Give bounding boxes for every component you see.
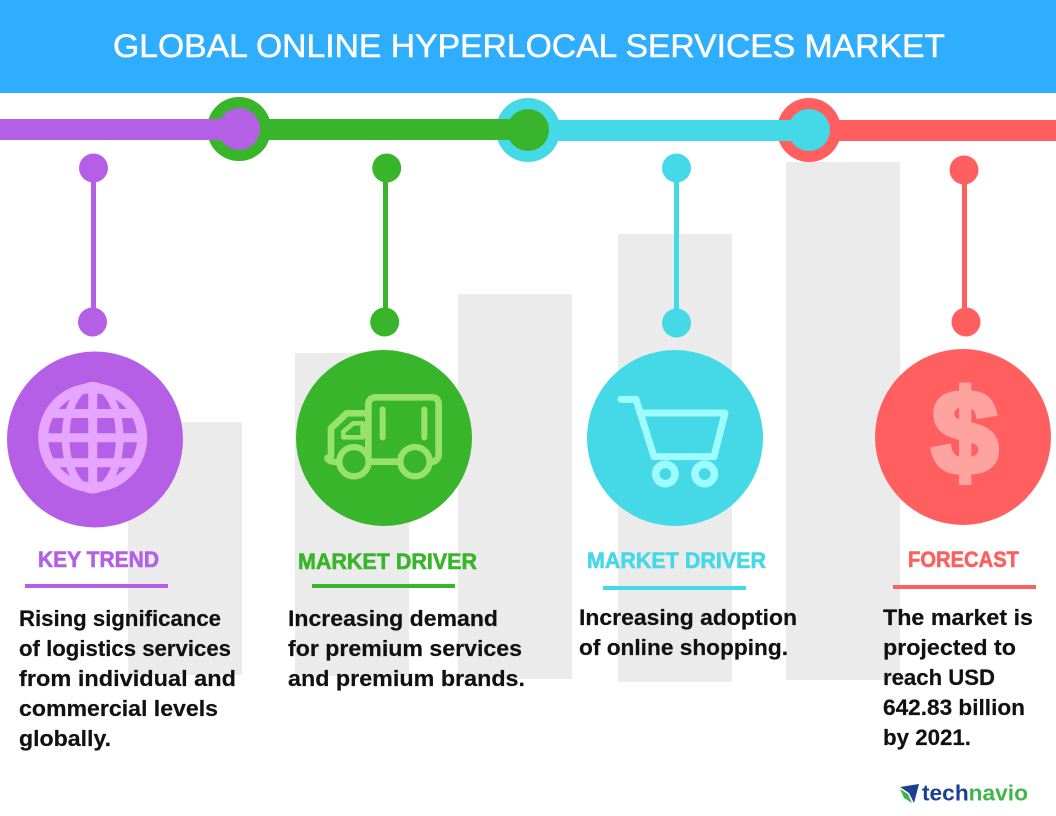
logo: technavio xyxy=(900,780,1028,806)
underline: delivery xyxy=(312,584,455,588)
text: shopping: of online shopping. xyxy=(579,635,788,660)
text: shopping: Increasing adoption xyxy=(579,605,797,630)
text: key trend: from individual and xyxy=(19,666,236,691)
icon: truck xyxy=(327,397,439,476)
circle: key trend xyxy=(7,352,183,528)
text: forecast: The market is xyxy=(883,605,1033,630)
text: forecast xyxy=(883,605,1033,750)
connector: forecast xyxy=(950,156,980,336)
text: forecast: projected to xyxy=(883,635,1016,660)
text: delivery: for premium services xyxy=(288,636,522,661)
connector: key trend xyxy=(78,154,108,336)
underline: forecast xyxy=(893,585,1036,589)
panel: key trend xyxy=(7,154,236,751)
text: forecast: by 2021. xyxy=(883,725,971,750)
text: delivery: Increasing demand xyxy=(288,606,498,631)
heading: forecast: FORECAST xyxy=(908,547,1019,572)
panel: forecast xyxy=(875,156,1051,750)
heading: market driver, shopping: MARKET DRIVER xyxy=(587,548,766,573)
connector: delivery xyxy=(370,154,401,336)
title: GLOBAL ONLINE HYPERLOCAL SERVICES MARKET xyxy=(113,28,945,64)
logo wordmark: technavio xyxy=(922,780,1028,806)
underline: key trend xyxy=(25,584,168,588)
icon: dollar sign: $ xyxy=(932,367,998,499)
icon: logo arrow xyxy=(900,784,919,803)
text: key trend: commercial levels xyxy=(19,696,218,721)
icon: shopping cart xyxy=(621,399,725,484)
text: key trend: Rising significance xyxy=(19,606,221,631)
text: key trend: of logistics services xyxy=(19,636,231,661)
text: shopping xyxy=(579,605,797,660)
circle: forecast xyxy=(875,349,1051,525)
timeline xyxy=(0,97,1056,162)
text: forecast: reach USD xyxy=(883,665,995,690)
panel: market driver, delivery xyxy=(288,154,525,691)
background bar chart xyxy=(128,162,900,682)
icon: globe xyxy=(42,386,143,490)
heading: market driver, delivery: MARKET DRIVER xyxy=(298,549,477,574)
header banner xyxy=(0,0,1056,93)
connector: shopping xyxy=(662,154,691,338)
text: forecast: 642.83 billion xyxy=(883,695,1025,720)
circle: delivery xyxy=(296,350,472,526)
text: key trend: globally. xyxy=(19,726,111,751)
underline: shopping xyxy=(603,586,746,590)
text: delivery xyxy=(288,606,525,691)
panel: market driver, shopping xyxy=(579,154,797,660)
text: delivery: and premium brands. xyxy=(288,666,525,691)
circle: shopping xyxy=(587,350,763,526)
heading: key trend: KEY TREND xyxy=(38,547,159,572)
text: key trend xyxy=(19,606,236,751)
